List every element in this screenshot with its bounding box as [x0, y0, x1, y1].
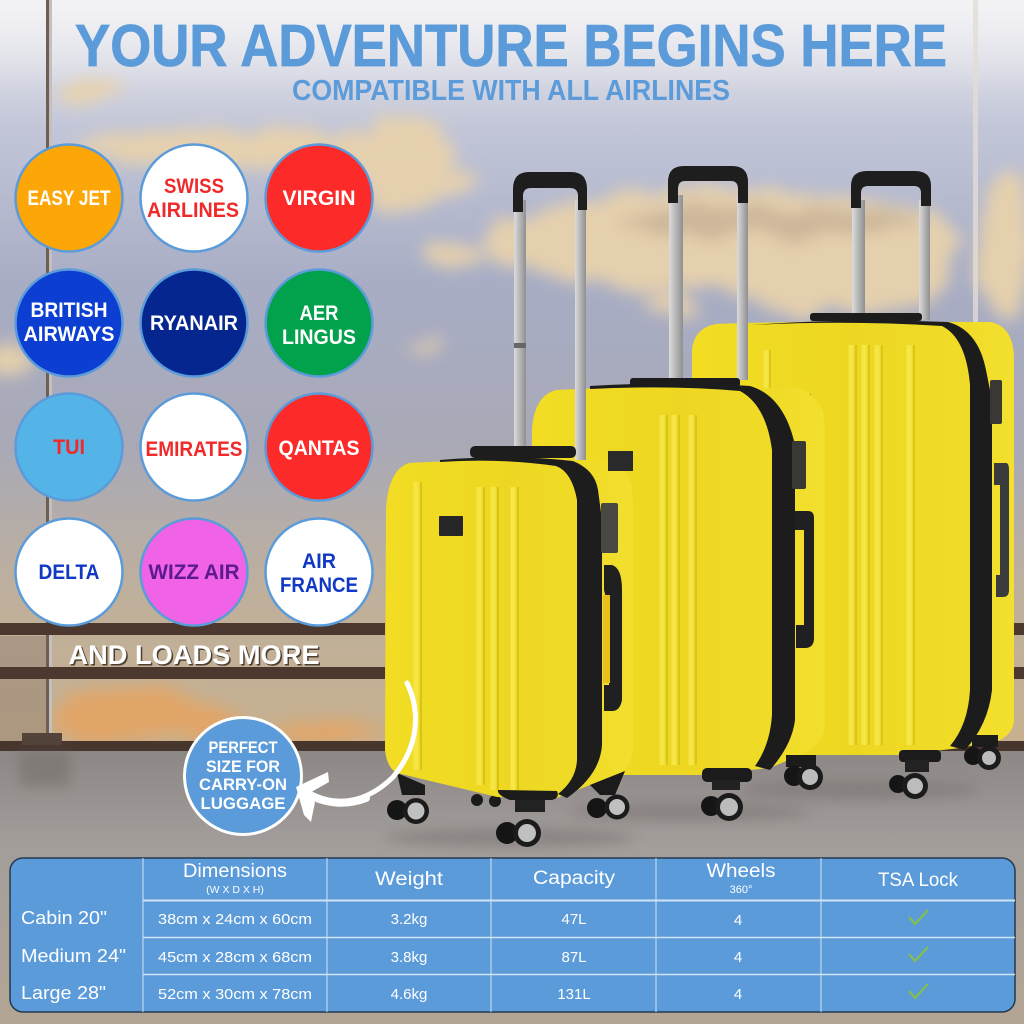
- badge: Ryanair: [140, 270, 248, 376]
- badge: British Airways: [16, 270, 122, 376]
- table header: Wheels: [706, 861, 776, 882]
- badge: Delta: DELTA: [38, 561, 100, 584]
- badge: TUI: TUI: [53, 436, 85, 459]
- badge: Ryanair: RYANAIR: [150, 312, 238, 335]
- badge: Virgin: VIRGIN: [282, 187, 356, 210]
- medium suitcase: [532, 166, 825, 821]
- table values: 4: [734, 912, 742, 929]
- TSA lock: [601, 503, 618, 553]
- badge: Qantas: QANTAS: [278, 437, 360, 460]
- and loads more: AND LOADS MORE: [68, 640, 320, 670]
- badge: Delta: [16, 518, 122, 626]
- table values: 45cm x 28cm x 68cm: [158, 949, 312, 966]
- badge: British Airways: AIRWAYS: [24, 323, 114, 346]
- badge: Emirates: EMIRATES: [146, 438, 242, 461]
- badge: Swiss Airlines: [140, 144, 248, 252]
- table values: 131L: [557, 986, 591, 1003]
- table values: 3.8kg: [391, 949, 427, 966]
- row labels: Cabin 20": [21, 907, 107, 928]
- callout: perfect size for carry-on luggage: SIZE FOR: [206, 758, 280, 776]
- badge: British Airways: BRITISH: [30, 299, 108, 322]
- small suitcase: [385, 172, 635, 847]
- table values: 47L: [561, 911, 587, 928]
- badge: Swiss Airlines: AIRLINES: [147, 199, 239, 222]
- table values: 4.6kg: [391, 986, 427, 1003]
- table values: [158, 911, 742, 1003]
- callout: perfect size for carry-on luggage: [184, 718, 302, 834]
- floor: [0, 751, 1024, 1024]
- badge: TUI: [16, 394, 122, 500]
- table values: 4: [734, 986, 742, 1003]
- table header: Capacity: [533, 868, 616, 889]
- large suitcase: [692, 171, 1014, 799]
- badge: Aer Lingus: LINGUS: [282, 326, 356, 349]
- table header: Dimensions: [183, 861, 287, 882]
- table values: 38cm x 24cm x 60cm: [158, 911, 312, 928]
- badge: Wizz Air: WIZZ AIR: [148, 561, 240, 584]
- window frame: [0, 0, 1024, 751]
- and loads more: AND LOADS MORE: [70, 642, 321, 672]
- medium logo badge: [608, 451, 633, 471]
- table header: Weight: [375, 869, 444, 890]
- rear wheels small: [471, 794, 483, 806]
- callout: perfect size for carry-on luggage: LUGGAGE: [200, 795, 286, 813]
- table values: 52cm x 30cm x 78cm: [158, 986, 312, 1003]
- title: YOUR ADVENTURE BEGINS HERE: [75, 13, 947, 79]
- row labels: Large 28": [21, 982, 106, 1003]
- callout: perfect size for carry-on luggage: PERFECT: [208, 739, 278, 757]
- badge: Easy Jet: [16, 144, 122, 252]
- background: airport window with sky: [0, 0, 1024, 745]
- badge: Easy Jet: EASY JET: [28, 187, 111, 210]
- table header: 360°: [730, 884, 752, 896]
- badge: Air France: FRANCE: [280, 574, 358, 597]
- arrow: callout to cabin suitcase: [296, 683, 415, 822]
- table values: 87L: [561, 949, 587, 966]
- side handle: [604, 565, 622, 711]
- row labels: Medium 24": [21, 945, 126, 966]
- subtitle: COMPATIBLE WITH ALL AIRLINES: [292, 75, 730, 107]
- table values: 4: [734, 949, 742, 966]
- table header: (W X D X H): [206, 884, 264, 896]
- airline badges: [16, 144, 372, 626]
- table header: [183, 861, 958, 896]
- badge: Aer Lingus: [266, 270, 372, 376]
- table values: 3.2kg: [391, 911, 427, 928]
- badge: Swiss Airlines: SWISS: [164, 175, 224, 198]
- callout: perfect size for carry-on luggage: CARRY-ON: [199, 776, 287, 794]
- TSA check marks: [909, 910, 928, 998]
- badge: Air France: AIR: [302, 550, 336, 573]
- row labels: [21, 907, 126, 1003]
- table header: TSA Lock: [878, 870, 958, 891]
- spec table: [10, 858, 1015, 1012]
- logo badge: [439, 516, 463, 536]
- badge: Emirates: [140, 394, 248, 500]
- badge: Aer Lingus: AER: [300, 302, 338, 325]
- badge: Virgin: [266, 144, 372, 252]
- badge: Qantas: [266, 394, 372, 500]
- badge: Wizz Air: [140, 518, 248, 626]
- badge: Air France: [266, 518, 372, 626]
